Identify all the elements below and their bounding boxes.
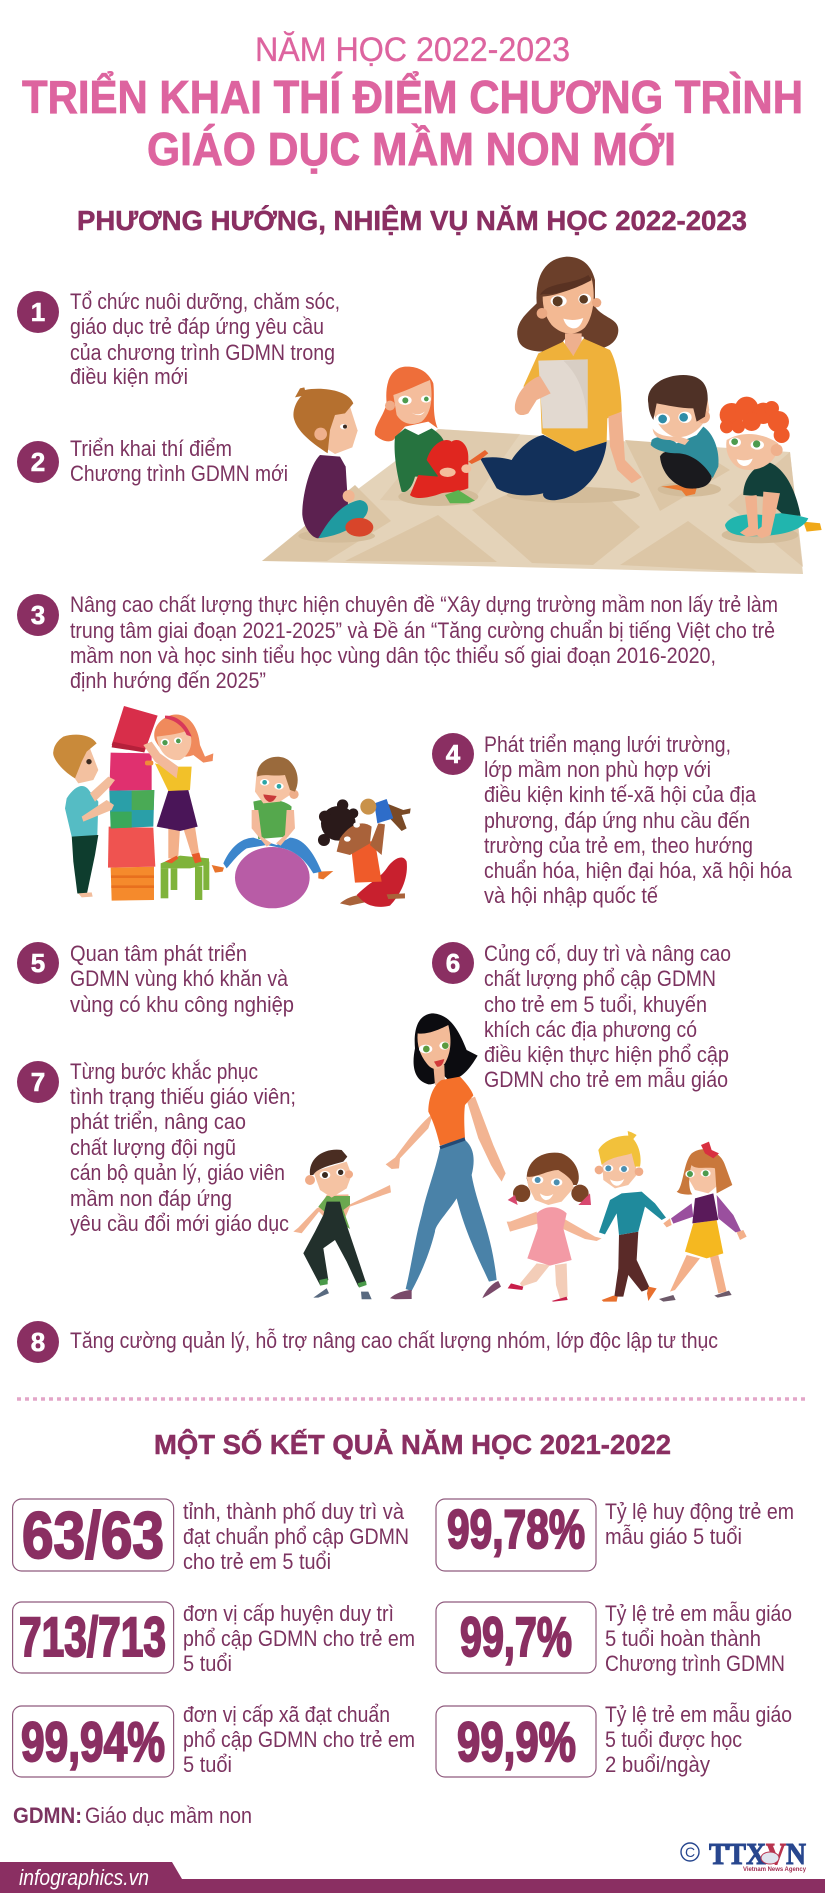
item 7: tình trạng thiếu giáo viên; <box>70 1084 296 1109</box>
item 7: cán bộ quản lý, giáo viên <box>70 1160 285 1185</box>
item 4: điều kiện kinh tế-xã hội của địa <box>484 782 757 807</box>
item 7: phát triển, nâng cao <box>70 1109 246 1134</box>
girl in pink dress <box>507 1153 602 1302</box>
item 1 <box>17 289 340 389</box>
item 4: phương, đáp ứng nhu cầu đến <box>484 808 750 833</box>
title <box>22 31 803 175</box>
stat: 99,9%: 5 tuổi được học <box>605 1727 742 1752</box>
footer bar <box>0 1862 825 1893</box>
stat: 99,9%: 99,9% <box>457 1710 576 1773</box>
boy in overalls <box>293 1150 391 1299</box>
stat: 99,7%: 99,7% <box>460 1605 572 1668</box>
boy in teal sweater <box>648 375 721 497</box>
item 8: Tăng cường quản lý, hỗ trợ nâng cao chất lượng nhóm, lớp độc lập tư thục <box>70 1328 718 1353</box>
item 6: 6 <box>446 948 460 978</box>
stat: 99,78%: 99,78% <box>447 1498 585 1560</box>
stat: 99,7%: Chương trình GDMN <box>605 1651 785 1676</box>
item 7 <box>17 1059 296 1236</box>
item 4: Phát triển mạng lưới trường, <box>484 732 731 757</box>
item 1: 1 <box>31 297 45 327</box>
item 5: GDMN vùng khó khăn và <box>70 966 289 991</box>
item 4: 4 <box>446 739 461 769</box>
title: GIÁO DỤC MẦM NON MỚI <box>147 123 676 175</box>
item 6: Củng cố, duy trì và nâng cao <box>484 941 731 966</box>
item 2: 2 <box>31 447 45 477</box>
item 7: yêu cầu đổi mới giáo dục <box>70 1211 289 1236</box>
item 5: vùng có khu công nghiệp <box>70 992 294 1017</box>
item 4: và hội nhập quốc tế <box>484 883 658 908</box>
item 2 <box>17 436 288 486</box>
footer bar: infographics.vn <box>19 1865 149 1890</box>
illustration: woman and boy walking <box>293 1013 506 1299</box>
blond boy <box>595 1131 666 1302</box>
title: NĂM HỌC 2022-2023 <box>255 31 570 69</box>
item 1: giáo dục trẻ đáp ứng yêu cầu <box>70 314 324 339</box>
item 4: trường của trẻ em, theo hướng <box>484 833 753 858</box>
girl with teddy bear <box>318 799 411 907</box>
item 8: 8 <box>31 1327 45 1357</box>
stat: 99,78%: mẫu giáo 5 tuổi <box>605 1524 742 1549</box>
stat: 99,7%: Tỷ lệ trẻ em mẫu giáo <box>605 1601 792 1626</box>
stool <box>161 856 209 900</box>
logo: TTXVN: TTXVN <box>709 1836 806 1871</box>
stat: 99,94%: 5 tuổi <box>183 1752 232 1777</box>
item 7: 7 <box>31 1067 45 1097</box>
item 6: GDMN cho trẻ em mẫu giáo <box>484 1067 728 1092</box>
stat: 713/713 <box>13 1601 415 1676</box>
item 2: Chương trình GDMN mới <box>70 461 288 486</box>
stat: 99,94%: đơn vị cấp xã đạt chuẩn <box>183 1702 390 1727</box>
stat: 713/713: 5 tuổi <box>183 1651 232 1676</box>
footnote <box>13 1803 252 1828</box>
item 3: mầm non và học sinh tiểu học vùng dân tộc thiểu số giai đoạn 2016-2020, <box>70 643 716 668</box>
item 6: điều kiện thực hiện phổ cập <box>484 1042 729 1067</box>
item 3 <box>17 592 778 693</box>
girl on stool <box>143 714 213 863</box>
item 6: chất lượng phổ cập GDMN <box>484 966 716 991</box>
stat: 99,78%: Tỷ lệ huy động trẻ em <box>605 1499 794 1524</box>
stat: 99,94%: 99,94% <box>21 1710 165 1773</box>
item 4: lớp mầm non phù hợp với <box>484 757 711 782</box>
item 6: cho trẻ em 5 tuổi, khuyến <box>484 992 707 1017</box>
footnote: Giáo dục mầm non <box>85 1803 252 1828</box>
item 5: 5 <box>31 948 45 978</box>
stat: 713/713: đơn vị cấp huyện duy trì <box>183 1601 394 1626</box>
item 3: định hướng đến 2025” <box>70 668 266 693</box>
item 3: 3 <box>31 600 45 630</box>
illustration: children playing with blocks <box>53 706 411 908</box>
item 1: điều kiện mới <box>70 364 188 389</box>
item 1: Tổ chức nuôi dưỡng, chăm sóc, <box>70 289 340 314</box>
stat: 63/63 <box>13 1498 409 1574</box>
stat: 99,7%: 5 tuổi hoàn thành <box>605 1626 761 1651</box>
heading: results: MỘT SỐ KẾT QUẢ NĂM HỌC 2021-2022 <box>154 1428 671 1460</box>
stat: 99,9% <box>436 1702 792 1777</box>
stacked blocks <box>108 706 158 901</box>
item 5 <box>17 941 294 1017</box>
illustration: three children holding hands <box>507 1131 747 1302</box>
stat: 63/63: cho trẻ em 5 tuổi <box>183 1549 331 1574</box>
item 6: khích các địa phương có <box>484 1017 697 1042</box>
boy with blocks <box>53 735 115 897</box>
item 7: chất lượng đội ngũ <box>70 1135 236 1160</box>
logo: TTXVN: C <box>685 1844 695 1860</box>
girl in yellow skirt <box>659 1142 747 1302</box>
stat: 63/63: tỉnh, thành phố duy trì và <box>183 1499 405 1524</box>
item 8 <box>17 1321 718 1363</box>
item 7: Từng bước khắc phục <box>70 1059 258 1084</box>
boy in purple <box>293 387 375 543</box>
woman <box>386 1013 506 1299</box>
stat: 713/713: 713/713 <box>19 1605 166 1668</box>
item 6 <box>432 941 731 1092</box>
item 7: mầm non đáp ứng <box>70 1186 232 1211</box>
curly-haired boy <box>720 397 822 543</box>
footnote: GDMN: <box>13 1803 82 1828</box>
item 4: chuẩn hóa, hiện đại hóa, xã hội hóa <box>484 858 793 883</box>
stat: 713/713: phổ cập GDMN cho trẻ em <box>183 1626 415 1651</box>
teacher <box>468 257 642 503</box>
girl in green <box>375 367 478 506</box>
item 4 <box>432 732 793 908</box>
stat: 63/63: đạt chuẩn phổ cập GDMN <box>183 1524 409 1549</box>
rug <box>262 429 803 574</box>
stat: 99,7% <box>436 1601 792 1676</box>
item 2: Triển khai thí điểm <box>70 436 232 461</box>
stat: 99,94% <box>13 1702 415 1777</box>
heading: directions: PHƯƠNG HƯỚNG, NHIỆM VỤ NĂM HỌC 2022-2023 <box>77 205 747 236</box>
boy on ball <box>212 757 333 908</box>
stat: 99,78% <box>436 1498 794 1571</box>
logo: TTXVN: Vietnam News Agency <box>743 1866 806 1873</box>
item 5: Quan tâm phát triển <box>70 941 247 966</box>
illustration: teacher and children on rug <box>262 257 822 574</box>
stat: 99,9%: Tỷ lệ trẻ em mẫu giáo <box>605 1702 792 1727</box>
stat: 99,94%: phổ cập GDMN cho trẻ em <box>183 1727 415 1752</box>
stat: 63/63: 63/63 <box>22 1498 164 1572</box>
stat: 99,9%: 2 buổi/ngày <box>605 1752 710 1777</box>
item 1: của chương trình GDMN trong <box>70 340 335 365</box>
